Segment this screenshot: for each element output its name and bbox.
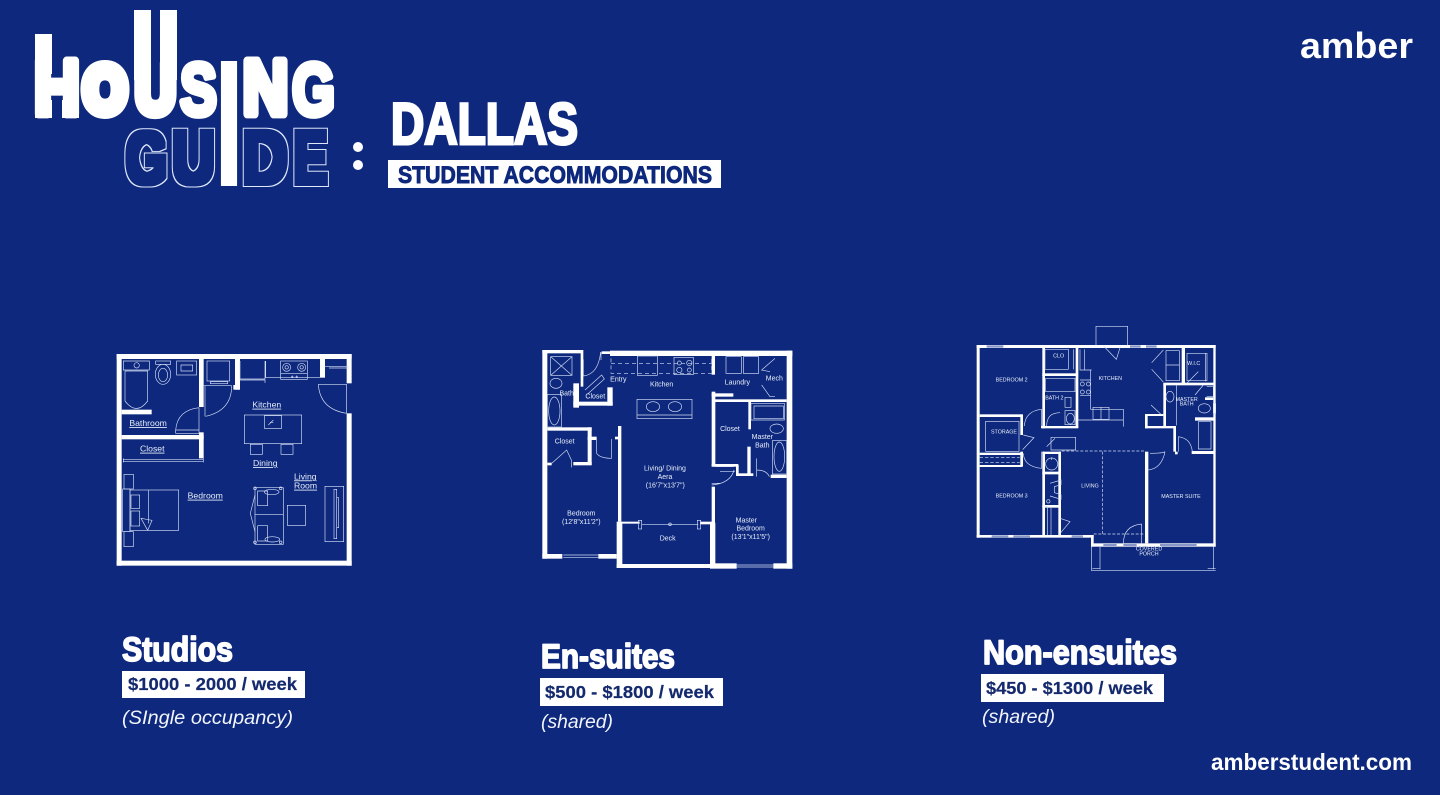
Non-ensuites price tag: $450 - $1300 / week <box>986 678 1153 698</box>
non-ensuite room labels: BATH <box>1180 402 1194 408</box>
en-suite room labels: Deck <box>660 535 676 542</box>
Studios heading: Studios <box>122 631 233 669</box>
card: En-suites <box>540 638 723 733</box>
Studios price tag <box>122 671 305 698</box>
en-suite room labels: Laundry <box>725 380 750 387</box>
title word: GUIDE outlined <box>126 117 327 200</box>
title word: HOUSING: O <box>84 54 126 126</box>
studio room labels: Dining <box>253 458 278 468</box>
en-suite room labels: Master <box>736 517 758 524</box>
floor plan: en-suite <box>542 350 792 569</box>
non-ensuite room labels: MASTER <box>1176 397 1198 403</box>
studio room labels: Kitchen <box>252 400 281 410</box>
Non-ensuites occupancy note: (shared) <box>982 707 1055 728</box>
studio room labels: Room <box>294 481 317 491</box>
non-ensuite room labels: MASTER SUITE <box>1161 494 1201 500</box>
en-suite fixtures <box>547 352 787 567</box>
title word: HOUSING: U <box>135 48 176 129</box>
en-suite room labels: Kitchen <box>650 381 673 388</box>
non-ensuite room labels: LIVING <box>1081 484 1099 490</box>
En-suites heading: En-suites <box>541 638 675 676</box>
en-suite room labels: (16'7"x13'7") <box>646 483 685 490</box>
floor plan: non-ensuite <box>977 326 1216 571</box>
studio room labels: Closet <box>140 444 165 454</box>
non-ensuite room labels: STORAGE <box>991 430 1017 436</box>
title word: HOUSING: I <box>213 21 245 225</box>
Studios price tag: $1000 - 2000 / week <box>128 674 297 694</box>
En-suites occupancy note: (shared) <box>541 712 613 733</box>
studio room labels: Living <box>294 471 317 481</box>
en-suite room labels: Closet <box>555 439 575 446</box>
studio room labels: Bedroom <box>188 491 223 501</box>
En-suites price tag: $500 - $1800 / week <box>545 682 714 702</box>
en-suite room labels: Entry <box>610 377 627 384</box>
En-suites price tag <box>540 678 723 706</box>
colon <box>353 142 363 170</box>
en-suite room labels: Bedroom <box>567 511 596 518</box>
en-suite room labels: Bedroom <box>736 526 765 533</box>
title word: GUIDE outlined: U <box>172 118 215 200</box>
en-suite room labels: Mech <box>766 375 783 382</box>
studio fixtures and furniture <box>123 361 349 547</box>
en-suite room labels <box>555 375 783 542</box>
subtitle banner: STUDENT ACCOMMODATIONS <box>398 162 712 189</box>
non-ensuite room labels: W.I.C <box>1187 361 1200 367</box>
non-ensuite room labels: CLO <box>1053 354 1064 360</box>
non-ensuite fixtures <box>980 326 1216 571</box>
en-suite room labels: Bath <box>559 391 574 398</box>
non-ensuite room labels <box>991 354 1201 558</box>
non-ensuite walls <box>977 345 1216 547</box>
non-ensuite room labels: BATH 2 <box>1045 395 1063 401</box>
non-ensuite room labels: COVERED <box>1136 547 1162 553</box>
studio room labels: Bathroom <box>129 418 167 428</box>
floor plan: studio <box>117 354 352 566</box>
en-suite walls <box>542 350 792 569</box>
card: Non-ensuites <box>981 634 1177 728</box>
en-suite room labels: Closet <box>585 394 605 401</box>
studio walls <box>117 354 352 566</box>
title word: HOUSING: S <box>180 49 217 131</box>
website url: amberstudent.com <box>1211 749 1412 775</box>
non-ensuite room labels: PORCH <box>1139 552 1159 558</box>
title: Housing Guide <box>34 10 363 225</box>
non-ensuite room labels: BEDROOM 3 <box>996 493 1028 499</box>
studio room labels <box>129 400 317 501</box>
en-suite room labels: Bath <box>755 442 770 449</box>
en-suite room labels: Living/ Dining <box>644 466 686 473</box>
title word: HOUSING: N <box>243 44 288 130</box>
en-suite room labels: (12'8"x11'2") <box>562 519 601 526</box>
en-suite room labels: Aera <box>658 474 672 481</box>
title word: HOUSING: H <box>34 44 80 130</box>
logo: amber: amber <box>1300 25 1413 66</box>
Non-ensuites heading: Non-ensuites <box>983 634 1177 672</box>
en-suite room labels: Master <box>752 434 774 441</box>
Non-ensuites price tag <box>981 674 1164 702</box>
non-ensuite room labels: BEDROOM 2 <box>996 377 1028 383</box>
title word: HOUSING: G <box>292 49 335 131</box>
heading: Dallas: DALLAS <box>391 92 578 157</box>
non-ensuite room labels: KITCHEN <box>1099 376 1122 382</box>
title word: HOUSING <box>34 10 335 225</box>
title word: GUIDE outlined: D <box>243 117 287 199</box>
title word: GUIDE outlined: G <box>126 119 167 199</box>
title word: GUIDE outlined: E <box>294 117 327 200</box>
en-suite room labels: Closet <box>720 426 740 433</box>
non-ensuite windows <box>987 345 1197 546</box>
Studios occupancy note: (SIngle occupancy) <box>122 708 293 729</box>
en-suite room labels: (13'1"x11'5") <box>731 534 770 541</box>
card: Studios <box>122 631 305 729</box>
